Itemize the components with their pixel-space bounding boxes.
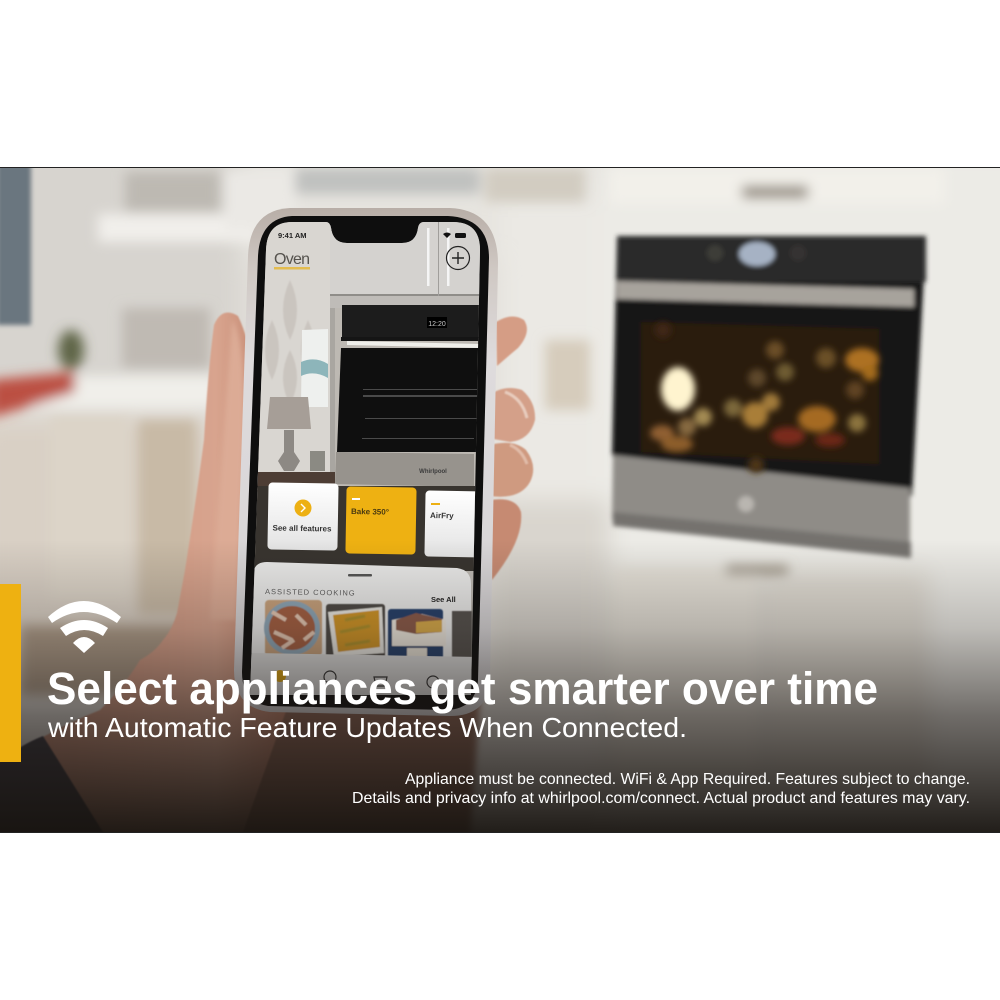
dark gradient overlay [0,540,1000,833]
phone screen [250,222,480,695]
oven window bokeh lights [650,322,879,473]
palm and wrist [43,313,290,840]
lamp [267,397,311,429]
subtitle: with Automatic Feature Updates When Connected. [47,712,687,743]
phone screen: 12:20 [428,321,446,328]
yellow accent bar [0,584,21,762]
title: Select appliances get smarter over time [47,663,878,714]
status bar and title: 9:41 AM [278,231,306,240]
disclaimer: Appliance must be connected. WiFi & App Required. Features subject to change. [405,771,970,788]
artwork [301,329,328,407]
phone screen: Oven [274,251,310,268]
card: see all features [267,482,339,551]
shelves and hood [0,168,812,700]
disclaimer: Details and privacy info at whirlpool.com/connect. Actual product and features may vary. [352,790,970,807]
card: airfry [424,490,476,558]
plus button [446,246,470,270]
phone bezel [242,216,489,710]
infographic photo scene [0,167,1000,833]
disclaimer [352,771,970,807]
screen oven [342,305,485,338]
cabinets [330,220,485,294]
food photos [264,600,472,657]
photo background: blurred kitchen [0,150,1000,870]
card: bake 350 [345,486,417,555]
lower arm behind phone [246,703,483,829]
phone screen: Whirlpool [419,469,447,475]
card: bake 350: Bake 350° [351,507,389,517]
assisted cooking sheet: See All [431,595,456,604]
card: airfry: AirFry [430,511,454,520]
icon: wifi [48,601,121,653]
bottom nav icons [276,670,286,682]
sleeve [0,736,101,832]
hand holding the phone [0,313,535,840]
assisted cooking sheet [250,562,472,695]
assisted cooking sheet: ASSISTED COOKING [265,587,356,598]
phone [234,208,498,717]
photo border lines [0,168,1000,832]
window [0,160,31,325]
wallpaper wall [257,222,332,490]
phone case [234,208,498,716]
card: see all features: See all features [272,523,332,534]
fingers [487,316,535,580]
oven appliance in background [612,236,926,558]
